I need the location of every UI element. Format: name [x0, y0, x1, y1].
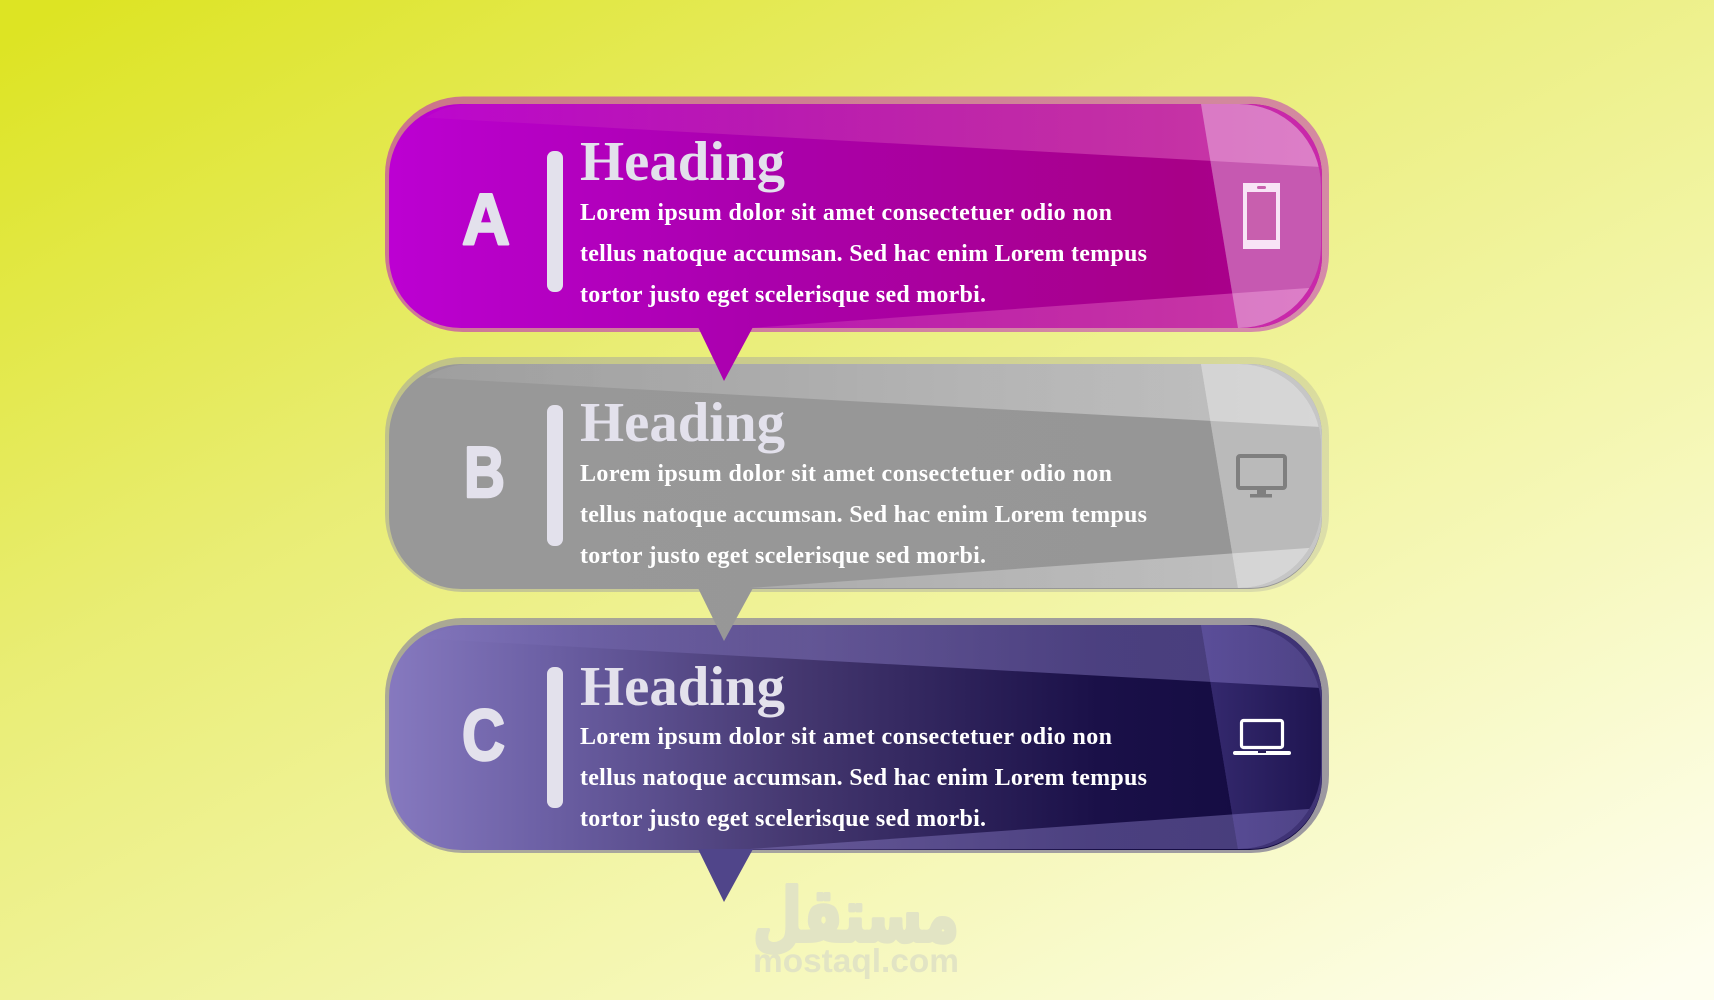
card B glass highlights — [389, 364, 1322, 588]
body text C: tellus natoque accumsan. Sed hac enim Lorem tempus — [580, 765, 1147, 791]
body text B: Lorem ipsum dolor sit amet consectetuer odio non — [580, 461, 1112, 487]
letter B: B — [464, 433, 505, 513]
card A edge sliver — [1242, 104, 1322, 328]
card A border — [385, 96, 1329, 332]
body text C: tortor justo eget scelerisque sed morbi. — [580, 806, 986, 832]
body text B: tortor justo eget scelerisque sed morbi. — [580, 543, 986, 569]
heading C: Heading — [580, 656, 785, 718]
panel: B — [385, 357, 1329, 592]
watermark arabic wordmark: مستقل — [753, 873, 959, 959]
heading A: Heading — [580, 131, 785, 193]
pointer: C — [698, 849, 753, 902]
divider B — [547, 405, 563, 546]
icon: desktop monitor — [1238, 456, 1285, 498]
body text C — [580, 724, 1147, 832]
panel: C — [385, 618, 1329, 853]
body text A: tortor justo eget scelerisque sed morbi. — [580, 282, 986, 308]
watermark latin wordmark: mostaql.com — [753, 942, 959, 979]
divider A — [547, 151, 563, 292]
letter C: C — [462, 696, 505, 776]
card A glass highlights — [389, 104, 1322, 328]
letter A: A — [462, 180, 510, 260]
body text A: Lorem ipsum dolor sit amet consectetuer odio non — [580, 200, 1112, 226]
card B border — [385, 357, 1329, 592]
body text B — [580, 461, 1147, 569]
card A body — [389, 104, 1322, 328]
body text A — [580, 200, 1147, 308]
watermark — [753, 873, 959, 979]
pointer: B — [698, 588, 753, 641]
heading B: Heading — [580, 392, 785, 454]
card C glass highlights — [590, 625, 1322, 849]
icon: smartphone — [1243, 183, 1280, 249]
card C border — [385, 618, 1329, 853]
card C body — [389, 625, 1322, 850]
panel: A — [385, 96, 1329, 332]
icon: laptop — [1233, 720, 1291, 755]
body text C: Lorem ipsum dolor sit amet consectetuer odio non — [580, 724, 1112, 750]
body text A: tellus natoque accumsan. Sed hac enim Lorem tempus — [580, 241, 1147, 267]
body text B: tellus natoque accumsan. Sed hac enim Lorem tempus — [580, 502, 1147, 528]
pointer: A — [698, 327, 753, 381]
card B body — [389, 364, 1322, 589]
divider C — [547, 667, 563, 808]
